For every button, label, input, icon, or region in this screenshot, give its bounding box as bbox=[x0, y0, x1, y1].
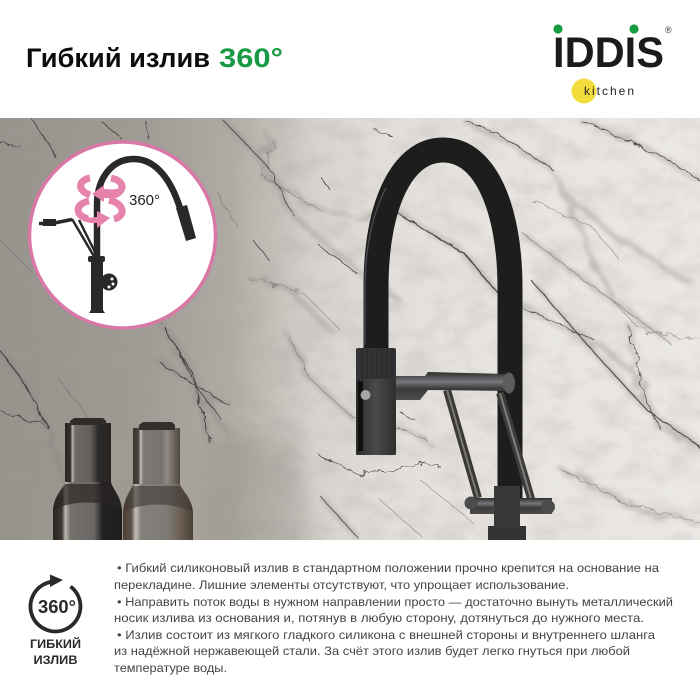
360 degree label: 360° bbox=[129, 192, 160, 209]
photo: marble wall with faucet and bottles bbox=[0, 118, 700, 560]
logo: IDDIS kitchen bbox=[553, 24, 672, 103]
lower ring left bbox=[78, 201, 89, 219]
description text: перекладине. Лишние элементы отсутствуют, что упрощает использование. bbox=[114, 578, 569, 592]
logo wordmark: IDDIS bbox=[553, 29, 664, 77]
faucet bar end cap bbox=[503, 372, 515, 394]
faucet cross bar bbox=[395, 372, 510, 400]
callout white disc bbox=[30, 142, 216, 328]
bottle 2 bbox=[123, 422, 193, 540]
faucet spout highlight bbox=[365, 188, 386, 345]
logo kitchen word: kitchen bbox=[584, 84, 634, 98]
faucet icon wheel bbox=[103, 274, 118, 290]
badge ring arrow bbox=[30, 582, 80, 631]
faucet diagonal arm left bbox=[447, 390, 478, 498]
faucet icon body bbox=[89, 262, 105, 313]
bottle 1 bbox=[53, 418, 122, 540]
icon caption: ГИБКИЙ bbox=[30, 636, 81, 651]
marble mottling bbox=[277, 118, 700, 540]
upper ring left bbox=[81, 178, 90, 195]
description text: • Направить поток воды в нужном направлении просто — достаточно вынуть металлический bbox=[117, 595, 673, 609]
badge number: 360° bbox=[38, 596, 76, 617]
title: 360° bbox=[219, 43, 283, 73]
faucet base bbox=[488, 526, 526, 540]
faucet icon bbox=[39, 159, 196, 313]
shadow on wall bbox=[208, 436, 318, 540]
arrow pointing right bbox=[87, 211, 110, 228]
logo kitchen yellow spot bbox=[572, 78, 596, 104]
faucet diagonal arm right bbox=[500, 393, 532, 502]
icon: 360 rotation badge bbox=[30, 574, 80, 631]
description text: носик излива из основания и, потянув в любую сторону, дотянуться до нужного места. bbox=[114, 611, 644, 625]
faucet pull-out head bbox=[356, 348, 396, 455]
icon caption: ИЗЛИВ bbox=[34, 653, 78, 667]
faucet icon braces bbox=[72, 219, 96, 258]
description text bbox=[114, 561, 673, 675]
marble wall bbox=[0, 118, 700, 540]
faucet flexible spout bbox=[376, 150, 510, 500]
faucet lower knob bar bbox=[470, 498, 552, 514]
upper ring right bbox=[111, 178, 122, 196]
marble veins bbox=[0, 120, 700, 537]
description text: температуре воды. bbox=[114, 661, 227, 675]
logo green dot right bbox=[629, 24, 639, 34]
callout circle: 360 degree rotation bbox=[30, 142, 216, 328]
faucet icon spout bbox=[97, 159, 180, 264]
logo registered mark: ® bbox=[665, 25, 672, 35]
logo green dot left bbox=[553, 24, 563, 34]
icon caption bbox=[30, 636, 81, 667]
faucet bbox=[356, 150, 555, 540]
pink rotation arrows bbox=[77, 178, 126, 228]
title: Гибкий излив bbox=[26, 43, 210, 73]
faucet base collar bbox=[494, 486, 520, 514]
faucet icon arm bbox=[39, 220, 72, 224]
faucet icon collar bbox=[88, 256, 105, 262]
lower ring right bbox=[109, 200, 122, 219]
faucet icon head bbox=[176, 205, 196, 241]
description text: • Излив состоит из мягкого гладкого силикона с внешней стороны и внутреннего шланга bbox=[117, 628, 655, 642]
description text: • Гибкий силиконовый излив в стандартном положении прочно крепится на основание на bbox=[117, 561, 659, 575]
description text: из надёжной нержавеющей стали. За счёт этого излив будет легко гнуться при любой bbox=[114, 644, 630, 658]
arrow pointing left bbox=[92, 185, 126, 202]
